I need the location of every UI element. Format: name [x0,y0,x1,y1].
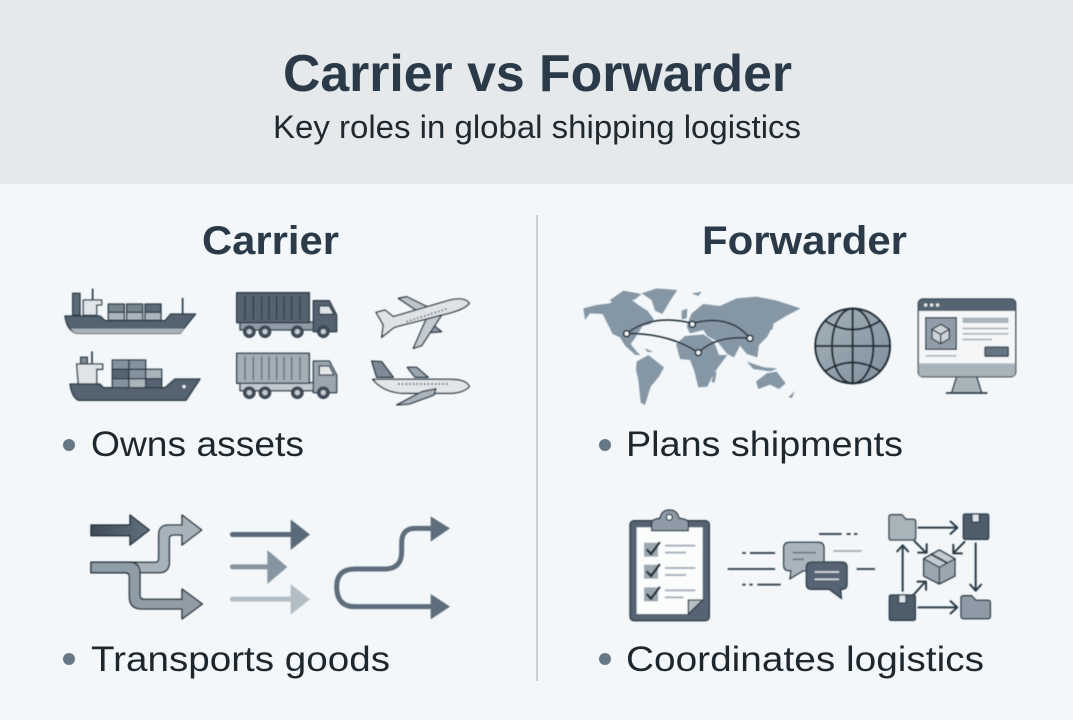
icon: chat bubbles with speed lines [728,534,875,598]
transport route arrows [91,515,450,619]
arrow: fast line [230,519,310,550]
carrier asset icons: ships, trucks, planes [65,289,469,405]
arrow: merge up [91,515,202,573]
bullet: Coordinates logistics: Coordinates logistics [626,640,984,679]
arrow: pale line [230,584,310,615]
heading: Forwarder: Forwarder [702,219,907,263]
subtitle: Key roles in global shipping logistics [273,109,801,145]
bullet: Transports goods: Transports goods [91,640,390,679]
arrow: branch down [91,562,202,619]
header band [0,0,1073,184]
icon: world map with routes [583,288,801,405]
bullet: Plans shipments: Plans shipments [626,425,903,464]
icon: plane level [372,361,469,405]
arrow: medium line [230,550,287,584]
icon: computer screen [918,299,1016,393]
icon: truck light [237,353,337,399]
heading: Carrier: Carrier [202,219,339,263]
icon: ship bottom [70,351,200,400]
icon: plane climbing [376,297,469,348]
forwarder planning icons: map, globe, screen [583,288,1016,405]
icon: globe [815,309,890,383]
icon: clipboard checklist [630,510,709,621]
coordination icons [630,510,990,621]
icon: logistics network [889,514,990,620]
arrow: dark block [91,515,149,545]
icon: ship top [65,289,196,333]
title: Carrier vs Forwarder [283,45,792,103]
arrow: winding route [337,516,450,619]
icon: truck dark [237,293,337,338]
bullet: Owns assets: Owns assets [91,425,304,464]
